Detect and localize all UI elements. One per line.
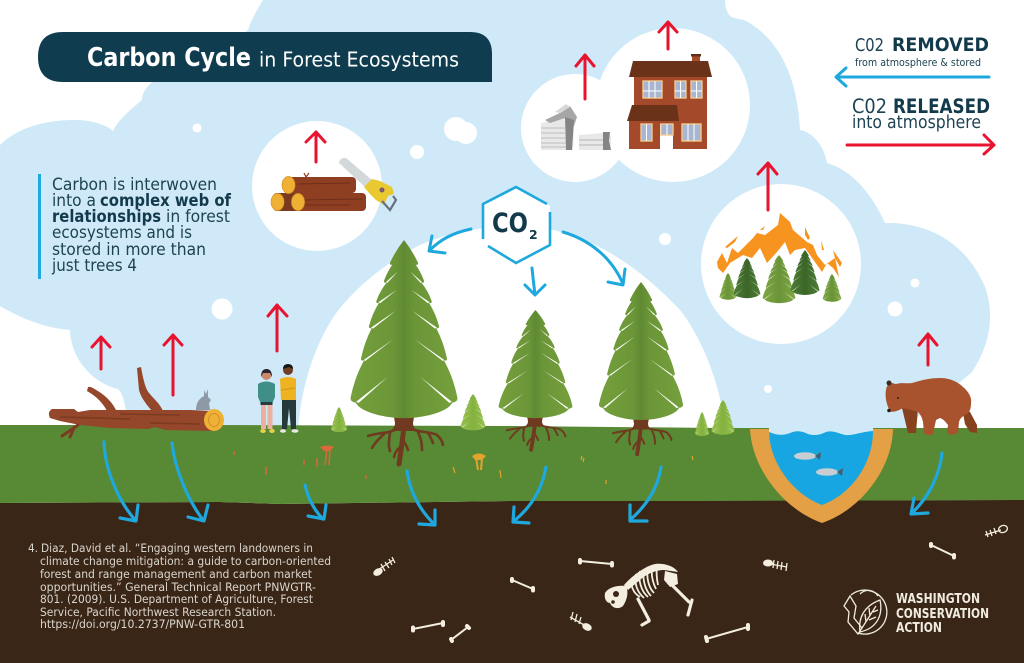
arrow: bear to soil — [911, 453, 942, 514]
logo wordmark: ACTION — [896, 620, 942, 636]
ground: grass — [0, 425, 1024, 504]
icon: brick house — [627, 54, 712, 149]
intro text block: Carbon is interwoven — [52, 175, 217, 194]
arrow: dead wood release 1 — [92, 337, 110, 369]
intro text block: into a — [52, 191, 96, 210]
legend: CO2 released: C02 — [852, 95, 887, 118]
icon: stacked logs — [271, 173, 366, 211]
pond — [750, 426, 893, 523]
icon: wildfire — [717, 213, 842, 303]
arrow: large tree to soil — [407, 471, 435, 525]
arrow: right tree to soil — [630, 467, 661, 521]
rabbit — [196, 389, 211, 410]
man figure — [280, 364, 298, 433]
citation text: https://doi.org/10.2737/PNW-GTR-801 — [40, 617, 245, 631]
arrow: CO2 to middle tree — [525, 268, 545, 295]
background: small white cloud puffs — [192, 117, 920, 393]
woman figure — [258, 369, 275, 433]
small tree — [695, 412, 709, 436]
fallen dead log — [49, 367, 224, 437]
legend: CO2 removed: from atmosphere & stored — [855, 57, 981, 69]
arrow: CO2 to right tree — [563, 232, 625, 285]
small tree — [711, 400, 735, 435]
CO2 hexagon badge — [482, 187, 550, 263]
fish — [794, 452, 821, 460]
title banner — [38, 32, 492, 82]
arrow: dead wood release 2 — [164, 335, 182, 395]
buried fish skeletons — [372, 524, 1008, 632]
background: sky cloud — [0, 0, 990, 432]
citation text — [28, 541, 331, 631]
logo emblem — [844, 590, 887, 634]
intro text block: relationships — [52, 207, 161, 226]
arrow: dead wood to soil 1 — [104, 442, 138, 521]
right tree with roots — [599, 282, 683, 454]
buried bear skeleton — [605, 564, 692, 625]
intro text block: in forest — [166, 207, 230, 226]
arrow: CO2 to large tree — [429, 229, 471, 253]
legend: CO2 released: RELEASED — [893, 95, 990, 118]
middle tree with roots — [499, 310, 572, 450]
soil layer — [0, 500, 1024, 663]
legend: CO2 removed — [836, 35, 989, 86]
legend: CO2 removed: C02 — [855, 35, 884, 56]
citation text: climate change mitigation: a guide to carbon-oriented — [40, 554, 331, 568]
citation text: opportunities.” General Technical Report PNWGTR- — [40, 580, 316, 594]
icon: brown bear — [886, 378, 977, 435]
logo wordmark: WASHINGTON — [896, 591, 980, 607]
arrow: paper release — [576, 55, 594, 99]
arrow: fire release — [758, 163, 777, 210]
arrow: dead wood to soil 2 — [172, 443, 208, 521]
large tree with roots — [351, 240, 457, 464]
CO2 hexagon badge: 2 — [529, 227, 538, 242]
white circle: logging — [252, 121, 382, 251]
legend: CO2 removed: REMOVED — [892, 35, 989, 56]
citation text: Service, Pacific Northwest Research Station. — [40, 605, 276, 619]
intro text block: stored in more than — [52, 240, 206, 259]
arrow: middle tree to soil — [513, 467, 546, 523]
mushrooms: orange cluster — [234, 446, 366, 479]
title banner: in Forest Ecosystems — [259, 48, 459, 72]
arrow: logging release — [306, 132, 325, 162]
icon: paper stacks — [541, 104, 611, 150]
buried bones — [413, 544, 954, 641]
small tree — [460, 394, 486, 430]
arrow: people release — [268, 305, 287, 351]
background: white hill behind trees — [298, 226, 725, 432]
citation text: 801. (2009). U.S. Department of Agriculture, Forest — [40, 592, 313, 606]
logo: Washington Conservation Action — [844, 590, 989, 636]
citation text: forest and range management and carbon market — [40, 567, 312, 581]
title banner: Carbon Cycle — [87, 43, 251, 73]
arrow: bear release — [919, 334, 937, 365]
legend: CO2 released — [847, 95, 994, 154]
arrow: house release — [659, 22, 677, 49]
intro text block — [38, 174, 232, 279]
citation text: Diaz, David et al. “Engaging western landowners in — [41, 541, 313, 555]
intro text block: just trees 4 — [51, 256, 137, 275]
white circle: house — [596, 28, 750, 182]
legend: CO2 released: into atmosphere — [852, 113, 981, 133]
fish — [816, 468, 843, 476]
intro text block: complex web of — [100, 191, 232, 210]
icon: chainsaw — [339, 158, 396, 210]
white circle: paper products — [521, 74, 629, 182]
citation text: 4. — [28, 541, 38, 555]
logo wordmark: CONSERVATION — [896, 606, 989, 622]
CO2 hexagon badge: CO — [492, 208, 528, 239]
intro text block: ecosystems and is — [52, 223, 192, 242]
logo wordmark — [896, 591, 989, 636]
mushrooms: yellow cluster — [453, 454, 693, 484]
white circle: wildfire — [701, 184, 861, 344]
arrow: people to soil — [305, 485, 326, 519]
small tree — [331, 407, 347, 432]
